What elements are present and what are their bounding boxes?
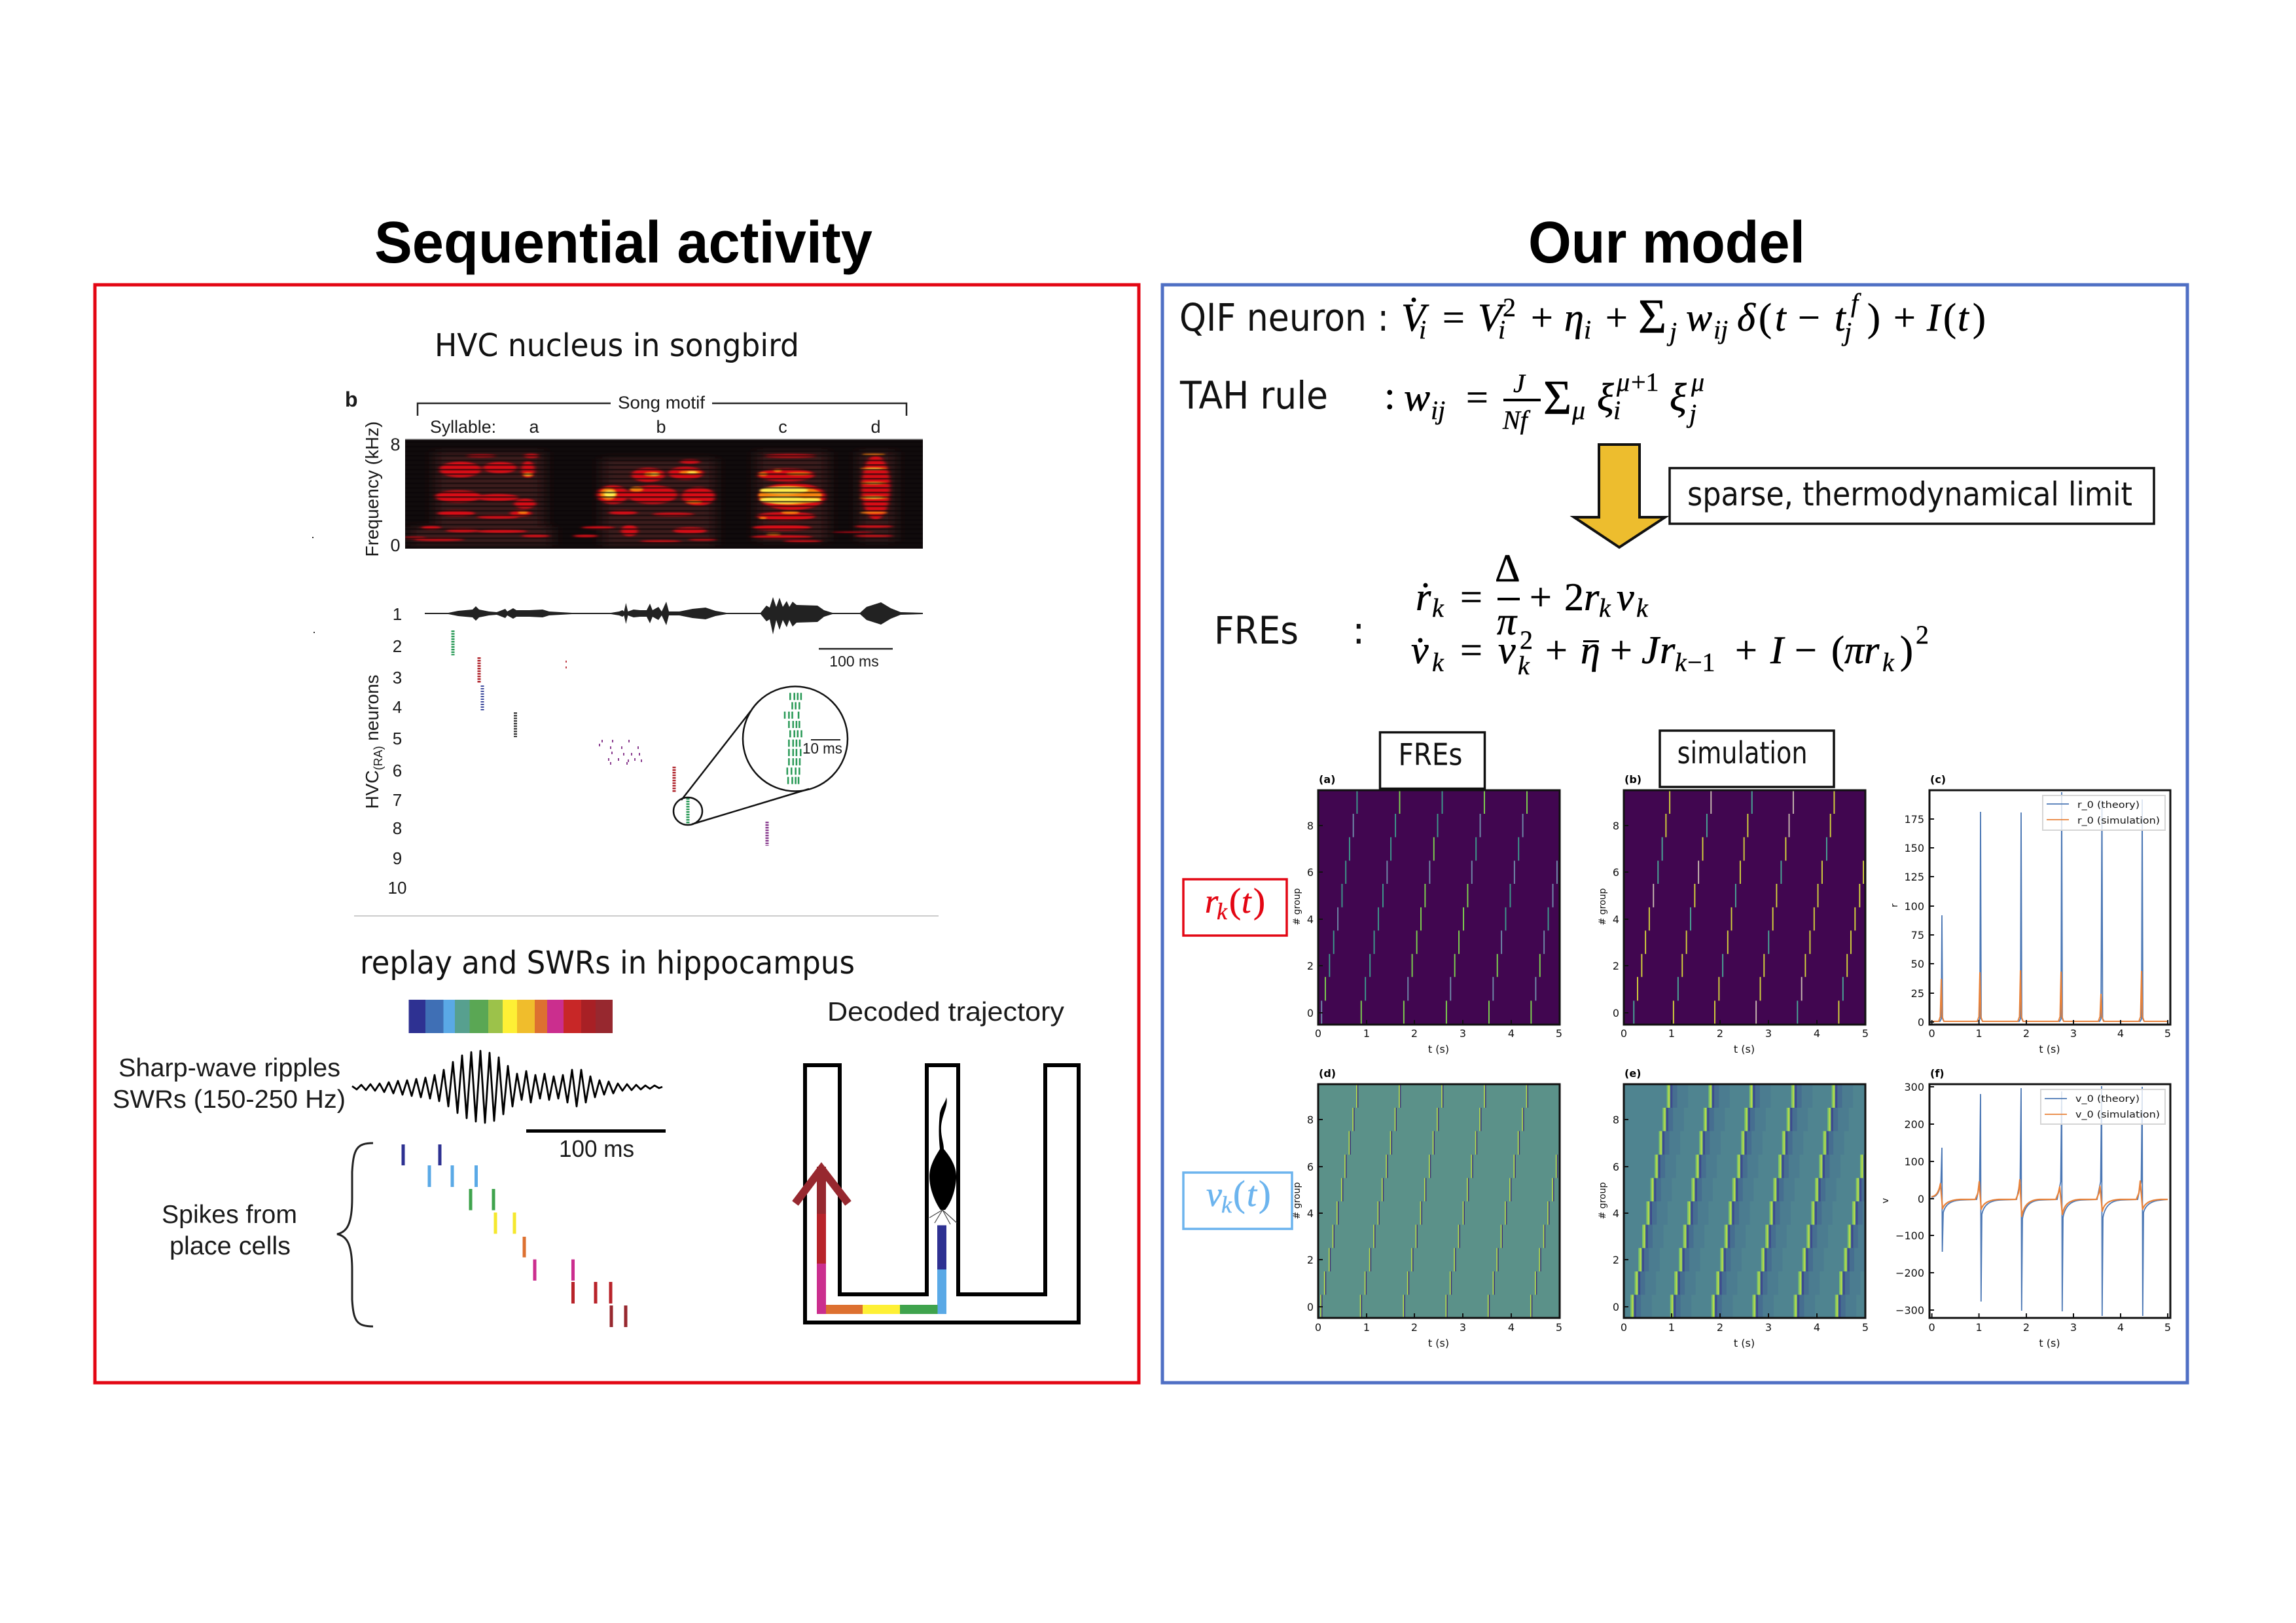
scale bar 100 ms: 100 ms <box>559 1135 634 1162</box>
equation: QIF neuron: Σ <box>1638 290 1666 344</box>
chart (d): FREs v_k raster <box>1292 1067 1562 1349</box>
decoded trajectory path <box>817 1167 946 1314</box>
neuron numbers: 4 <box>393 697 402 717</box>
chart (d): FREs v_k raster: # group <box>1292 1182 1302 1219</box>
equation: QIF neuron: ( <box>1759 296 1772 339</box>
zoom inset: 10 ms burst: 10 ms <box>802 740 842 757</box>
chart (d): FREs v_k raster: 8 <box>1307 1114 1314 1126</box>
equation: QIF neuron: i <box>1584 315 1591 344</box>
chart (f): v_0 theory vs simulation: 100 <box>1904 1156 1924 1168</box>
chart (c): r_0 theory vs simulation: 0 <box>1918 1016 1924 1029</box>
chart (f): v_0 theory vs simulation: t (s) <box>2039 1337 2060 1349</box>
chart (c): r_0 theory vs simulation: 25 <box>1911 987 1924 1000</box>
chart (b): simulation r_k raster: t (s) <box>1734 1043 1755 1055</box>
panel: sequential activity <box>95 285 1139 1383</box>
chart (c): r_0 theory vs simulation: (c) <box>1930 773 1946 786</box>
equation: membrane potential v_k: − <box>1795 629 1817 672</box>
chart (a): FREs r_k raster: 0 <box>1307 1007 1314 1019</box>
chart (d): FREs v_k raster: 1 <box>1363 1321 1370 1334</box>
equation: TAH rule: j <box>1686 399 1696 428</box>
chart (f): v_0 theory vs simulation: 5 <box>2164 1321 2171 1334</box>
chart (c): r_0 theory vs simulation: 100 <box>1904 900 1924 913</box>
chart (c): r_0 theory vs simulation: 1 <box>1976 1027 1982 1040</box>
equation: TAH rule: Nf <box>1502 405 1531 435</box>
panel label b: b <box>345 388 358 411</box>
spectrogram axis labels: 8 <box>390 435 401 454</box>
row label: r_k(t): r <box>1205 883 1219 921</box>
ripple trace <box>352 1051 662 1123</box>
chart (f): v_0 theory vs simulation: v_0 (simulation) <box>2075 1110 2160 1120</box>
chart (f): v_0 theory vs simulation: 2 <box>2023 1321 2030 1334</box>
chart (f): v_0 theory vs simulation <box>1880 1067 2171 1349</box>
zoom inset: 10 ms burst <box>673 686 848 825</box>
equation: QIF neuron: w <box>1686 296 1712 339</box>
chart (c): r_0 theory vs simulation: 125 <box>1904 871 1924 883</box>
column label: FREs: FREs <box>1398 737 1462 773</box>
equation: QIF neuron: + <box>1605 296 1628 339</box>
equation: firing rate r_k: = <box>1460 575 1482 619</box>
chart (c): r_0 theory vs simulation: 50 <box>1911 958 1924 970</box>
equation: firing rate r_k: k <box>1599 593 1611 623</box>
equation: membrane potential v_k: η <box>1581 629 1600 672</box>
equation: QIF neuron: V <box>1478 296 1506 339</box>
chart (a): FREs r_k raster: 5 <box>1556 1027 1562 1040</box>
equation: firing rate r_k: π <box>1497 600 1518 643</box>
chart (f): v_0 theory vs simulation: −100 <box>1895 1230 1924 1242</box>
chart (e): simulation v_k raster: # group <box>1598 1182 1608 1219</box>
chart (d): FREs v_k raster: 4 <box>1508 1321 1515 1334</box>
equation: TAH rule: ij <box>1431 395 1445 425</box>
panel: our model <box>1162 285 2187 1383</box>
equation: firing rate r_k: r <box>1584 575 1600 619</box>
equation: membrane potential v_k: I <box>1770 629 1785 672</box>
axis label: HVC(RA) neurons: HVC <box>362 770 382 809</box>
chart (f): v_0 theory vs simulation: 300 <box>1904 1081 1924 1093</box>
chart (e): simulation v_k raster: 1 <box>1668 1321 1675 1334</box>
label: sharp-wave ripples <box>113 1054 346 1114</box>
equation: membrane potential v_k: ) <box>1900 629 1913 672</box>
equation: firing rate r_k: 2 <box>1564 575 1584 619</box>
chart (d): FREs v_k raster: 0 <box>1307 1301 1314 1313</box>
equation: firing rate r_k <box>1416 547 1649 643</box>
column label: FREs <box>1380 733 1484 789</box>
syllable labels <box>430 417 881 437</box>
equation: QIF neuron: t <box>1835 296 1846 339</box>
chart (e): simulation v_k raster: 2 <box>1613 1254 1619 1266</box>
chart (e): simulation v_k raster: 0 <box>1621 1321 1627 1334</box>
chart (e): simulation v_k raster: 4 <box>1613 1207 1619 1220</box>
sound waveform <box>425 597 923 634</box>
maze outline <box>805 1065 1079 1322</box>
axis label: HVC(RA) neurons: (RA) <box>372 746 385 770</box>
chart (c): r_0 theory vs simulation: 5 <box>2164 1027 2171 1040</box>
neuron numbers: 7 <box>393 790 402 810</box>
chart (b): simulation r_k raster: 4 <box>1814 1027 1820 1040</box>
chart (e): simulation v_k raster: 8 <box>1613 1114 1619 1126</box>
row label: r_k(t): ) <box>1253 881 1265 921</box>
equation: TAH rule: i <box>1613 395 1621 425</box>
chart (a): FREs r_k raster: 4 <box>1508 1027 1515 1040</box>
chart (c): r_0 theory vs simulation: r <box>1890 903 1900 907</box>
chart (c): r_0 theory vs simulation: 0 <box>1929 1027 1935 1040</box>
song motif bracket: Song motif <box>618 393 706 412</box>
chart (b): simulation r_k raster: 8 <box>1613 820 1619 832</box>
column label: simulation: simulation <box>1677 735 1808 771</box>
spectrogram axis labels <box>362 422 401 556</box>
row label: v_k(t): ( <box>1233 1174 1246 1214</box>
neuron numbers: 10 <box>388 878 406 898</box>
chart (b): simulation r_k raster: 0 <box>1613 1007 1619 1019</box>
equation: QIF neuron: 2 <box>1503 293 1516 322</box>
syllable labels: c <box>778 417 787 437</box>
equation: membrane potential v_k: k <box>1518 651 1530 680</box>
row label: v_k(t): ) <box>1259 1174 1271 1214</box>
equation: QIF neuron: i <box>1498 315 1505 344</box>
chart (c): r_0 theory vs simulation: t (s) <box>2039 1043 2060 1055</box>
spectrogram <box>403 439 923 549</box>
equation label: FREs: FREs <box>1214 608 1299 653</box>
equation: membrane potential v_k: 2 <box>1916 620 1929 649</box>
neuron numbers: 6 <box>393 761 402 780</box>
equation: membrane potential v_k <box>1411 620 1929 680</box>
equation: membrane potential v_k: k <box>1675 647 1687 677</box>
chart (f): v_0 theory vs simulation: 0 <box>1918 1193 1924 1205</box>
equation: QIF neuron <box>1401 288 1986 346</box>
chart (f): v_0 theory vs simulation: (f) <box>1930 1067 1945 1080</box>
brace <box>337 1143 373 1326</box>
equation: QIF neuron: η <box>1564 296 1584 339</box>
equation: membrane potential v_k: −1 <box>1687 647 1715 677</box>
equation: QIF neuron: ij <box>1713 315 1728 344</box>
equation: firing rate r_k: r <box>1416 575 1431 619</box>
equation: membrane potential v_k: k <box>1882 647 1895 677</box>
chart (e): simulation v_k raster: 3 <box>1765 1321 1772 1334</box>
row label: v_k(t): t <box>1247 1175 1258 1214</box>
equation: TAH rule: J <box>1513 369 1526 398</box>
chart (c): r_0 theory vs simulation: r_0 (theory) <box>2077 800 2140 811</box>
neuron numbers: 2 <box>393 636 402 656</box>
song motif bracket <box>418 393 906 416</box>
equation: TAH rule: +1 <box>1631 367 1659 397</box>
chart (a): FREs r_k raster: 8 <box>1307 820 1314 832</box>
equation: membrane potential v_k: π <box>1844 629 1865 672</box>
chart (e): simulation v_k raster: 2 <box>1717 1321 1723 1334</box>
chart (e): simulation v_k raster: 4 <box>1814 1321 1820 1334</box>
equation: QIF neuron: V <box>1401 296 1429 339</box>
chart (d): FREs v_k raster: 2 <box>1307 1254 1314 1266</box>
row label: r_k(t) <box>1183 879 1287 936</box>
equation: TAH rule <box>1384 367 1704 435</box>
chart (b): simulation r_k raster: 2 <box>1613 960 1619 972</box>
equation: membrane potential v_k: + <box>1735 629 1757 672</box>
chart (e): simulation v_k raster: 6 <box>1613 1161 1619 1173</box>
column label: simulation <box>1660 731 1834 787</box>
chart (a): FREs r_k raster: 3 <box>1460 1027 1466 1040</box>
chart (e): simulation v_k raster: (e) <box>1624 1067 1641 1080</box>
equation: membrane potential v_k: 2 <box>1520 625 1533 655</box>
chart (f): v_0 theory vs simulation: v_0 (theory) <box>2075 1094 2140 1104</box>
chart (b): simulation r_k raster: 2 <box>1717 1027 1723 1040</box>
equation: QIF neuron: = <box>1443 296 1465 339</box>
equation: QIF neuron: I <box>1926 296 1942 339</box>
label: sharp-wave ripples: Sharp-wave ripples <box>118 1054 340 1082</box>
equation: firing rate r_k: v <box>1617 575 1634 619</box>
chart (a): FREs r_k raster: (a) <box>1319 773 1335 786</box>
chart (f): v_0 theory vs simulation: v <box>1880 1198 1891 1203</box>
chart (b): simulation r_k raster: 3 <box>1765 1027 1772 1040</box>
chart (e): simulation v_k raster <box>1598 1067 1873 1349</box>
chart (f): v_0 theory vs simulation: 3 <box>2070 1321 2077 1334</box>
chart (d): FREs v_k raster: 5 <box>1556 1321 1562 1334</box>
equation: TAH rule: μ <box>1571 395 1585 425</box>
arrow head <box>795 1169 848 1203</box>
stray marks <box>312 538 315 632</box>
equation: QIF neuron: − <box>1798 296 1820 339</box>
chart (f): v_0 theory vs simulation: 1 <box>1976 1321 1982 1334</box>
chart (b): simulation r_k raster: 4 <box>1613 913 1619 926</box>
chart (f): v_0 theory vs simulation: −300 <box>1895 1304 1924 1317</box>
chart (f): v_0 theory vs simulation: −200 <box>1895 1267 1924 1279</box>
equation: QIF neuron: + <box>1893 296 1916 339</box>
spectrogram axis labels: 0 <box>390 536 401 555</box>
equation: firing rate r_k: k <box>1432 593 1444 623</box>
title: Our model: Our model <box>1528 210 1805 276</box>
equation: TAH rule: w <box>1404 376 1430 419</box>
chart (a): FREs r_k raster: t (s) <box>1428 1043 1449 1055</box>
chart (d): FREs v_k raster: 4 <box>1307 1207 1314 1220</box>
equation: TAH rule: Σ <box>1543 371 1571 425</box>
place-cell spike raster <box>403 1144 626 1327</box>
chart (e): simulation v_k raster: t (s) <box>1734 1337 1755 1349</box>
syllable labels: a <box>529 417 539 437</box>
scale bar 100 ms: 100 ms <box>829 653 879 670</box>
chart (a): FREs r_k raster: 2 <box>1307 960 1314 972</box>
equation: firing rate r_k: Δ <box>1495 547 1520 590</box>
equation: TAH rule: = <box>1466 376 1488 419</box>
scale bar 100 ms <box>819 649 893 670</box>
equation: membrane potential v_k: v <box>1411 629 1429 672</box>
heading: replay and SWRs in hippocampus: replay and SWRs in hippocampus <box>360 945 855 981</box>
equation: TAH rule: ξ <box>1597 376 1614 419</box>
equation label: FREs: : <box>1352 608 1365 653</box>
callout: sparse, thermodynamical limit: sparse, thermodynamical limit <box>1687 475 2132 513</box>
row label: r_k(t): t <box>1242 883 1252 921</box>
chart (c): r_0 theory vs simulation: 75 <box>1911 929 1924 941</box>
equation: QIF neuron: j <box>1841 317 1852 346</box>
chart (d): FREs v_k raster: 2 <box>1411 1321 1418 1334</box>
chart (b): simulation r_k raster: 0 <box>1621 1027 1627 1040</box>
equation: membrane potential v_k: = <box>1460 629 1482 672</box>
chart (b): simulation r_k raster: 1 <box>1668 1027 1675 1040</box>
equation: TAH rule: μ <box>1616 367 1630 397</box>
equation: QIF neuron: ( <box>1943 296 1956 339</box>
row label: r_k(t): ( <box>1229 881 1241 921</box>
chart (f): v_0 theory vs simulation: 4 <box>2117 1321 2124 1334</box>
callout: sparse, thermodynamical limit <box>1670 468 2154 524</box>
label: spikes from place cells <box>162 1201 297 1260</box>
chart (e): simulation v_k raster: 5 <box>1862 1321 1869 1334</box>
neuron numbers: 8 <box>393 818 402 838</box>
equation: QIF neuron: j <box>1666 317 1677 346</box>
equation: QIF neuron: t <box>1958 296 1969 339</box>
chart (d): FREs v_k raster: 6 <box>1307 1161 1314 1173</box>
chart (c): r_0 theory vs simulation: 3 <box>2070 1027 2077 1040</box>
syllable labels: d <box>870 417 881 437</box>
equation: membrane potential v_k: ( <box>1831 629 1844 672</box>
equation: QIF neuron: δ <box>1737 296 1756 339</box>
chart (c): r_0 theory vs simulation: 4 <box>2117 1027 2124 1040</box>
chart (b): simulation r_k raster <box>1598 773 1869 1055</box>
equation: membrane potential v_k: v <box>1498 629 1516 672</box>
equation: membrane potential v_k: r <box>1864 629 1880 672</box>
chart (b): simulation r_k raster: 5 <box>1862 1027 1869 1040</box>
neuron numbers: 1 <box>393 604 402 624</box>
chart (a): FREs r_k raster: 1 <box>1363 1027 1370 1040</box>
song raster ticks <box>453 630 767 846</box>
label: sharp-wave ripples: SWRs (150-250 Hz) <box>113 1085 346 1114</box>
equation: QIF neuron: ) <box>1973 296 1986 339</box>
equation: firing rate r_k: + <box>1530 575 1552 619</box>
arrow: derivation <box>1574 445 1665 547</box>
syllable labels: b <box>656 417 666 437</box>
equation label: QIF neuron: QIF neuron : <box>1179 295 1389 340</box>
neuron numbers: 9 <box>393 848 402 868</box>
chart (a): FREs r_k raster: 0 <box>1315 1027 1321 1040</box>
row label: r_k(t): k <box>1217 898 1228 924</box>
equation: QIF neuron: t <box>1775 296 1787 339</box>
chart (f): v_0 theory vs simulation: 200 <box>1904 1118 1924 1131</box>
equation: membrane potential v_k: + <box>1610 629 1632 672</box>
equation: membrane potential v_k: + <box>1545 629 1568 672</box>
chart (d): FREs v_k raster: 0 <box>1315 1321 1321 1334</box>
row label: v_k(t): v <box>1206 1175 1222 1214</box>
equation: TAH rule: : <box>1384 374 1395 417</box>
equation: TAH rule: μ <box>1691 367 1704 397</box>
equation: membrane potential v_k: k <box>1432 647 1444 677</box>
chart (a): FREs r_k raster <box>1292 773 1562 1055</box>
label: spikes from place cells: place cells <box>170 1232 291 1260</box>
equation: membrane potential v_k: J <box>1641 629 1660 672</box>
spectrogram axis labels: Frequency (kHz) <box>362 422 382 556</box>
chart (d): FREs v_k raster: t (s) <box>1428 1337 1449 1349</box>
row label: v_k(t) <box>1183 1173 1292 1229</box>
chart (a): FREs r_k raster: 4 <box>1307 913 1314 926</box>
syllable labels: Syllable: <box>430 417 496 437</box>
label: spikes from place cells: Spikes from <box>162 1201 297 1229</box>
chart (a): FREs r_k raster: # group <box>1292 888 1302 925</box>
chart (c): r_0 theory vs simulation: 150 <box>1904 842 1924 854</box>
row label: v_k(t): k <box>1221 1192 1232 1218</box>
neuron numbers: 3 <box>393 668 402 687</box>
neuron numbers <box>388 604 406 898</box>
equation: QIF neuron: i <box>1419 315 1426 344</box>
equation: TAH rule: ξ <box>1670 376 1687 419</box>
chart (c): r_0 theory vs simulation: r_0 (simulation) <box>2077 816 2160 826</box>
chart (c): r_0 theory vs simulation <box>1890 773 2171 1055</box>
label: Decoded trajectory: Decoded trajectory <box>827 996 1065 1027</box>
chart (d): FREs v_k raster: (d) <box>1319 1067 1336 1080</box>
heading: HVC nucleus in songbird: HVC nucleus in songbird <box>435 327 799 364</box>
chart (c): r_0 theory vs simulation: 2 <box>2023 1027 2030 1040</box>
title: Sequential activity: Sequential activity <box>374 210 872 276</box>
neuron numbers: 5 <box>393 729 402 748</box>
equation: QIF neuron: + <box>1531 296 1553 339</box>
chart (e): simulation v_k raster: 0 <box>1613 1301 1619 1313</box>
divider line <box>354 915 939 917</box>
chart (a): FREs r_k raster: 6 <box>1307 866 1314 879</box>
chart (f): v_0 theory vs simulation: 0 <box>1929 1321 1935 1334</box>
equation label: FREs <box>1214 608 1365 653</box>
axis label: HVC(RA) neurons: neurons <box>362 674 382 746</box>
chart (d): FREs v_k raster: 3 <box>1460 1321 1466 1334</box>
equation: firing rate r_k: k <box>1636 593 1649 623</box>
chart (a): FREs r_k raster: 2 <box>1411 1027 1418 1040</box>
icon: rat <box>929 1097 957 1224</box>
equation: membrane potential v_k: r <box>1660 629 1676 672</box>
chart (b): simulation r_k raster: (b) <box>1624 773 1641 786</box>
equation: QIF neuron: f <box>1851 288 1861 318</box>
chart (c): r_0 theory vs simulation: 175 <box>1904 813 1924 826</box>
chart (b): simulation r_k raster: # group <box>1598 888 1608 925</box>
equation: QIF neuron: ) <box>1867 296 1880 339</box>
chart (b): simulation r_k raster: 6 <box>1613 866 1619 879</box>
equation label: TAH rule: TAH rule <box>1179 373 1328 418</box>
rainbow colour bar <box>408 1000 613 1033</box>
